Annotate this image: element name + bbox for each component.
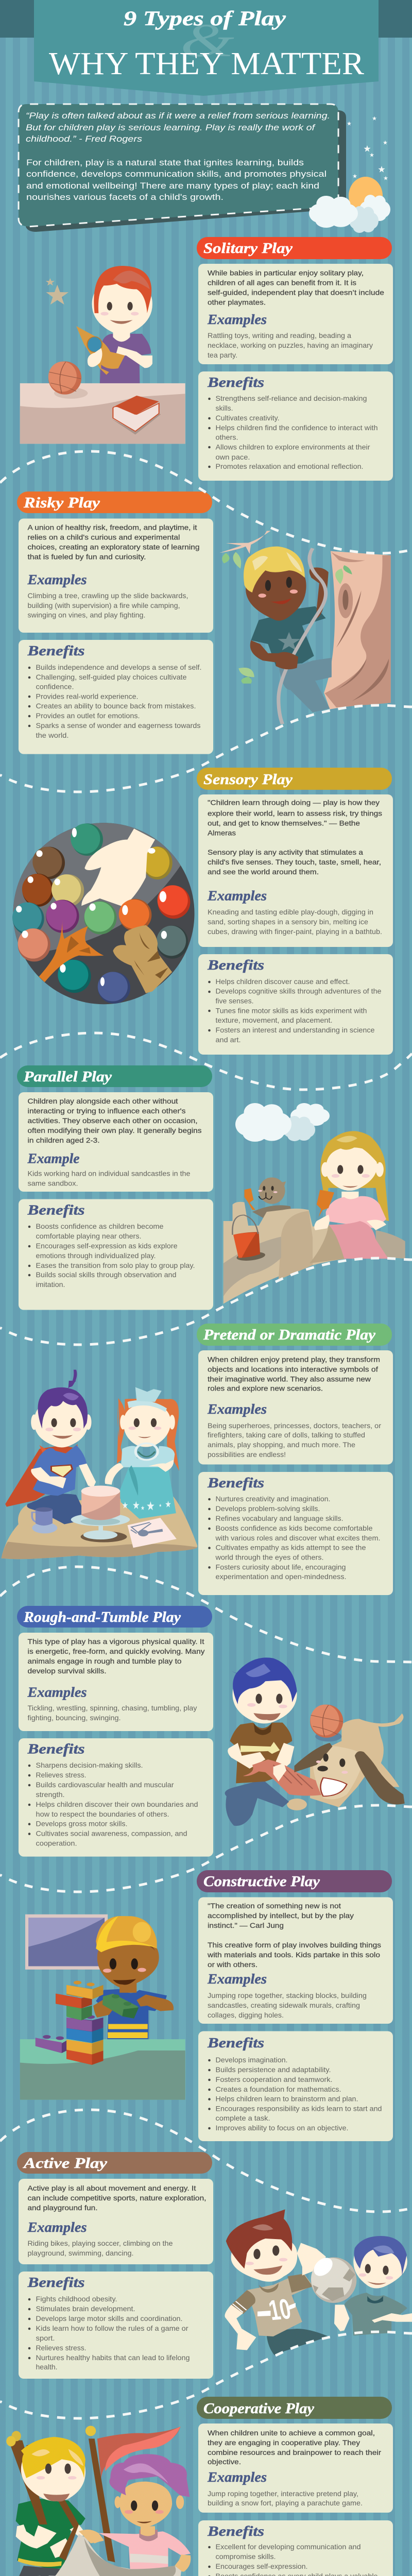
panel: introduction: childhood.” - Fred Rogers xyxy=(26,134,143,144)
illustration: hands in paint palette xyxy=(12,823,195,1005)
description and examples card: accomplished by intellect, but by the play xyxy=(208,1911,354,1920)
benefits card: Creates a foundation for mathematics. xyxy=(215,2085,341,2093)
benefits card: imitation. xyxy=(36,1280,65,1289)
benefits card xyxy=(198,1472,393,1595)
description and examples card: playground, swimming, dancing. xyxy=(28,2249,134,2257)
benefits card xyxy=(198,2031,393,2141)
heading pill: Parallel Play xyxy=(23,1069,112,1085)
panel: rough-and-tumble play xyxy=(17,1606,213,1857)
benefits card: Boosts confidence as children become xyxy=(36,1222,164,1230)
description and examples card: Sensory play is any activity that stimulates a xyxy=(208,848,363,856)
heading pill: Risky Play xyxy=(23,495,100,511)
description and examples card: out, and get to know themselves." — Bethe xyxy=(208,819,360,827)
description and examples card: develop survival skills. xyxy=(28,1667,106,1675)
heading pill xyxy=(197,1870,392,1892)
benefits card: Refines vocabulary and language skills. xyxy=(215,1514,343,1522)
benefits card: Fights childhood obesity. xyxy=(36,2295,117,2303)
cooperative benefits card: Benefits xyxy=(207,2523,264,2539)
description and examples card: self-guided, independent play that doesn’t include xyxy=(208,289,384,297)
heading pill: Solitary Play xyxy=(203,241,293,257)
description and examples card: Tickling, wrestling, spinning, chasing, tumbling, play xyxy=(28,1704,197,1712)
benefits card: Helps children discover cause and effect. xyxy=(215,977,350,986)
description and examples card: Examples xyxy=(27,2219,87,2235)
benefits card: Develops imagination. xyxy=(215,2056,287,2064)
benefits card: Develops problem-solving skills. xyxy=(215,1504,320,1513)
description and examples card: Jumping rope together, stacking blocks, building xyxy=(208,1991,367,1999)
benefits card: Fosters cooperation and teamwork. xyxy=(215,2075,333,2083)
heading pill: Rough-and-Tumble Play xyxy=(23,1609,181,1625)
benefits card: Develops large motor skills and coordination. xyxy=(36,2314,182,2323)
heading pill: Active Play xyxy=(23,2156,108,2172)
description and examples card xyxy=(19,1633,213,1731)
benefits card: Builds social skills through observation and xyxy=(36,1270,176,1279)
benefits card: Kids learn how to follow the rules of a game or xyxy=(36,2324,188,2332)
illustration: boy climbing tree on rope xyxy=(219,531,391,724)
description and examples card: choices, creating an exploratory state of learning xyxy=(28,543,200,551)
benefits card: five senses. xyxy=(215,996,253,1005)
description and examples card: Examples xyxy=(207,2469,267,2485)
heading pill xyxy=(17,1606,212,1628)
benefits card: experimentation and open-mindedness. xyxy=(215,1572,346,1581)
panel: constructive play xyxy=(197,1870,393,2141)
description and examples card: can include competitive sports, nature exploration, xyxy=(28,2194,206,2202)
benefits card: Provides real-world experience. xyxy=(36,692,138,700)
panel: solitary play xyxy=(197,237,393,481)
description and examples card: Active play is all about movement and energy. It xyxy=(28,2184,196,2192)
panel: introduction: For children, play is a natural state that ignites learning, builds xyxy=(26,158,304,167)
benefits card: Fosters curiosity about life, encouraging xyxy=(215,1563,346,1571)
panel: risky play xyxy=(17,492,213,754)
benefits card xyxy=(19,640,213,754)
illustration: boy and dog tugging a towel xyxy=(225,1657,405,1826)
title: Why They Matter: WHY THEY MATTER xyxy=(49,46,365,81)
description and examples card: possibilities are endless! xyxy=(208,1450,286,1459)
header banner xyxy=(0,0,412,96)
description and examples card: combine resources and brainpower to reach their xyxy=(208,2448,381,2456)
benefits card: Nurtures creativity and imagination. xyxy=(215,1495,331,1503)
benefits card: health. xyxy=(36,2363,58,2371)
description and examples card: relies on a child's curious and experimental xyxy=(28,533,180,541)
description and example card: interacting or trying to influence each other's xyxy=(28,1107,185,1115)
heading pill xyxy=(197,2397,392,2419)
description and examples card: children of all ages can benefit from it. It is xyxy=(208,279,356,287)
benefits card: Develops gross motor skills. xyxy=(36,1820,128,1828)
benefits card: Strengthens self-reliance and decision-making xyxy=(215,394,367,402)
benefits card: Benefits xyxy=(207,2035,264,2050)
description and examples card: child's five senses. They touch, taste, smell, hear, xyxy=(208,858,381,866)
description and example card: in children aged 2-3. xyxy=(28,1136,100,1144)
benefits card: Sharpens decision-making skills. xyxy=(36,1761,143,1769)
description and examples card: objects and locations into interactive symbols of xyxy=(208,1365,378,1374)
description and examples card: Riding bikes, playing soccer, climbing on the xyxy=(28,2239,173,2247)
description and examples card xyxy=(198,1350,393,1464)
description and examples card: This type of play has a vigorous physical quality. It xyxy=(28,1637,204,1646)
panel: introduction: confidence, develops communication skills, and promotes physical xyxy=(26,169,327,179)
benefits card: Benefits xyxy=(207,375,264,390)
description and examples card xyxy=(198,2424,393,2513)
description and examples card: Examples xyxy=(27,572,87,587)
description and examples card xyxy=(198,794,393,947)
benefits card: Helps children discover their own boundaries and xyxy=(36,1800,198,1808)
benefits card: world through the eyes of others. xyxy=(215,1553,323,1561)
illustration: two boys with soccer ball: 10 xyxy=(266,2293,294,2327)
benefits card: with various roles and discover what excites them. xyxy=(215,1534,380,1542)
description and examples card: roles and explore new scenarios. xyxy=(208,1384,323,1393)
cooperative benefits card xyxy=(198,2520,393,2576)
benefits card: Cultivates empathy as kids attempt to see the xyxy=(215,1544,366,1552)
description and examples card: sandcastles, creating sidewalk murals, crafting xyxy=(208,2001,360,2009)
description and examples card: Climbing a tree, crawling up the slide backwards, xyxy=(28,591,188,600)
benefits card: own pace. xyxy=(215,453,250,461)
illustration: kids with flags and parachute xyxy=(6,2426,191,2576)
panel: parallel play xyxy=(17,1065,213,1310)
description and examples card: animals, play shopping, and much more. The xyxy=(208,1440,355,1449)
benefits card: others. xyxy=(215,433,238,442)
description and examples card: "The creation of something new is not xyxy=(208,1902,341,1910)
benefits card: strength. xyxy=(36,1790,65,1799)
description and examples card: Examples xyxy=(27,1685,87,1700)
description and examples card: instinct." — Carl Jung xyxy=(208,1921,284,1929)
description and examples card: firefighters, taking care of dolls, talking to stuffed xyxy=(208,1431,365,1439)
benefits card: Nurtures healthy habits that can lead to lifelong xyxy=(36,2353,190,2362)
benefits card: Builds independence and develops a sense of self. xyxy=(36,663,202,671)
benefits card: Improves ability to focus on an objective. xyxy=(215,2124,348,2132)
benefits card xyxy=(198,371,393,481)
heading pill: Cooperative Play xyxy=(203,2401,315,2417)
illustration: clouds xyxy=(235,1103,330,1142)
benefits card: the world. xyxy=(36,731,69,739)
benefits card: Tunes fine motor skills as kids experiment with xyxy=(215,1006,367,1014)
heading pill xyxy=(17,1065,212,1087)
description and examples card: Being superheroes, princesses, doctors, teachers, or xyxy=(208,1421,381,1430)
benefits card: Encourages responsibility as kids learn to start and xyxy=(215,2104,382,2112)
icon: stars, sun and clouds xyxy=(309,116,390,233)
description and examples card: Rattling toys, writing and reading, beading a xyxy=(208,331,351,340)
description and examples card: Kneading and tasting edible play-dough, digging in xyxy=(208,908,373,916)
benefits card: Cultivates social awareness, compassion, and xyxy=(36,1829,187,1838)
description and examples card: they are engaging in cooperative play. They xyxy=(208,2438,360,2447)
description and examples card: fighting, bouncing, swinging. xyxy=(28,1714,121,1722)
benefits card: comfortable playing near others. xyxy=(36,1232,141,1240)
description and examples card: swinging on vines, and play fighting. xyxy=(28,611,145,619)
description and examples card: that is fueled by fun and curiosity. xyxy=(28,552,146,561)
panel: introduction: But for children play is serious learning. Play is really the work of xyxy=(26,123,316,132)
description and examples card: and playground fun. xyxy=(28,2204,98,2212)
cooperative benefits card: compromise skills. xyxy=(215,2552,276,2561)
benefits card: Builds persistence and adaptability. xyxy=(215,2065,331,2074)
benefits card: cooperation. xyxy=(36,1839,77,1848)
benefits card: Fosters an interest and understanding in science xyxy=(215,1026,375,1034)
illustration: boy in hard hat stacking blocks xyxy=(20,1914,185,2100)
benefits card: Provides an outlet for emotions. xyxy=(36,711,140,720)
description and examples card: building a snow fort, playing a parachute game. xyxy=(208,2499,363,2507)
benefits card: Creates an ability to bounce back from mistakes. xyxy=(36,702,196,710)
benefits card: Boosts confidence as kids become comfortable xyxy=(215,1524,373,1532)
heading pill xyxy=(197,237,392,259)
benefits card: complete a task. xyxy=(215,2114,270,2122)
benefits card: Benefits xyxy=(207,1475,264,1490)
description and examples card xyxy=(19,2179,213,2264)
panel: active play xyxy=(17,2152,213,2379)
panel: introduction: nourishes various facets of a child's growth. xyxy=(26,192,224,202)
benefits card: Eases the transition from solo play to group play. xyxy=(36,1261,195,1269)
description and examples card: necklace, working on puzzles, having an imaginary xyxy=(208,341,373,349)
description and examples card: building (with supervision) a fire while camping, xyxy=(28,601,180,609)
description and examples card xyxy=(19,518,213,633)
benefits card: Benefits xyxy=(207,957,264,973)
benefits card: sport. xyxy=(36,2334,55,2342)
description and examples card: "Children learn through doing — play is how they xyxy=(208,799,380,807)
description and examples card: other playmates. xyxy=(208,298,266,306)
illustration: boy and girl pretending with cake xyxy=(2,1370,198,1559)
description and examples card: When children enjoy pretend play, they transform xyxy=(208,1355,380,1364)
description and examples card: This creative form of play involves building things xyxy=(208,1941,381,1949)
benefits card: Sparks a sense of wonder and eagerness towards xyxy=(36,721,201,730)
benefits card: Promotes relaxation and emotional reflection. xyxy=(215,462,364,470)
benefits card xyxy=(19,1199,213,1310)
benefits card: confidence. xyxy=(36,682,74,690)
benefits card: Helps children learn to brainstorm and plan. xyxy=(215,2095,358,2103)
heading pill xyxy=(17,2152,212,2174)
benefits card xyxy=(19,2272,213,2379)
benefits card: Builds cardiovascular health and muscular xyxy=(36,1781,174,1789)
description and examples card: and see the world around them. xyxy=(208,868,319,876)
description and examples card: or with others. xyxy=(208,1960,258,1969)
benefits card: Cultivates creativity. xyxy=(215,414,279,422)
panel: introduction: and emotional wellbeing! There are many types of play; each kind xyxy=(26,181,319,191)
description and examples card: When children unite to achieve a common goal, xyxy=(208,2429,375,2437)
description and examples card: Examples xyxy=(207,888,267,904)
description and examples card: sand, sorting shapes in a sensory bin, melting ice xyxy=(208,918,368,926)
description and examples card: with materials and tools. Kids partake in this solo xyxy=(207,1951,380,1959)
title: 9 Types of Play: 9 Types of Play xyxy=(124,7,286,30)
description and examples card: explore their world, learn to assess risk, try things xyxy=(208,809,382,818)
description and example card: Kids working hard on individual sandcastles in the xyxy=(28,1170,191,1178)
description and examples card: Examples xyxy=(207,312,267,327)
benefits card: skills. xyxy=(215,404,233,412)
benefits card: Stimulates brain development. xyxy=(36,2304,135,2313)
heading pill xyxy=(197,1324,392,1346)
panel: introduction: “Play is often talked about as if it were a relief from serious learning. xyxy=(26,111,330,121)
description and examples card: animals engage in rough and tumble play to xyxy=(28,1657,182,1665)
benefits card: Benefits xyxy=(27,643,85,658)
cooperative benefits card: Encourages self-expression. xyxy=(215,2562,308,2570)
heading pill xyxy=(197,768,392,790)
description and examples card: tea party. xyxy=(208,351,237,359)
description and examples card: Examples xyxy=(207,1401,267,1417)
description and examples card xyxy=(198,1897,393,2024)
benefits card: emotions through individualized play. xyxy=(36,1251,156,1260)
heading pill: Pretend or Dramatic Play xyxy=(203,1327,376,1343)
title ampersand: & xyxy=(180,14,235,66)
benefits card: Benefits xyxy=(27,1202,85,1218)
illustration: two boys with soccer ball xyxy=(225,2209,412,2355)
benefits card: Relieves stress. xyxy=(36,2344,87,2352)
benefits card: Allows children to explore environments at their xyxy=(215,443,370,451)
benefits card: Helps children find the confidence to interact with xyxy=(215,423,378,432)
panel: cooperative play xyxy=(197,2397,393,2513)
description and examples card: Jump roping together, interactive pretend play, xyxy=(208,2489,358,2498)
illustration: boy with rocket, ball and book xyxy=(20,266,185,444)
description and example card xyxy=(19,1092,213,1192)
description and examples card: Almeras xyxy=(208,828,236,837)
heading pill xyxy=(17,492,212,513)
description and example card: Example xyxy=(27,1151,80,1166)
description and examples card: cubes, drawing with finger-paint, playing in a bathtub. xyxy=(208,927,382,936)
description and examples card: collages, digging holes. xyxy=(208,2011,284,2019)
description and examples card xyxy=(198,264,393,364)
benefits card xyxy=(198,954,393,1055)
benefits card: and art. xyxy=(215,1036,241,1044)
description and examples card: A union of healthy risk, freedom, and playtime, it xyxy=(28,523,197,532)
heading pill: Constructive Play xyxy=(203,1874,320,1890)
description and example card: activities. They observe each other on occasion, xyxy=(28,1116,198,1125)
benefits card: texture, movement, and placement. xyxy=(215,1016,333,1024)
benefits card xyxy=(19,1738,213,1857)
description and example card: Children play alongside each other without xyxy=(28,1097,178,1105)
benefits card: Benefits xyxy=(27,2275,85,2290)
panel: pretend or dramatic play xyxy=(197,1324,393,1595)
benefits card: Benefits xyxy=(27,1741,85,1757)
description and examples card: While babies in particular enjoy solitary play, xyxy=(208,269,364,277)
benefits card: Relieves stress. xyxy=(36,1771,87,1779)
description and examples card: is energetic, free-form, and quickly evolving. Many xyxy=(28,1647,205,1655)
panel: sensory play xyxy=(197,768,393,1055)
benefits card: Develops cognitive skills through adventures of the xyxy=(215,987,382,995)
benefits card: Challenging, self-guided play choices cultivate xyxy=(36,673,187,681)
benefits card: how to respect the boundaries of others. xyxy=(36,1810,169,1818)
panel: introduction xyxy=(19,104,346,232)
benefits card: Encourages self-expression as kids explore xyxy=(36,1242,178,1250)
illustration: girl and cat with sandcastle xyxy=(224,1131,405,1304)
description and example card: same sandbox. xyxy=(28,1179,78,1187)
description and examples card: objective. xyxy=(208,2458,241,2466)
description and examples card: Examples xyxy=(207,1971,267,1987)
heading pill: Sensory Play xyxy=(203,772,293,788)
cooperative benefits card: Excellent for developing communication and xyxy=(215,2543,360,2551)
description and example card: often modifying their own play. It generally begins xyxy=(28,1126,202,1134)
description and examples card: their imaginative world. They also assume new xyxy=(208,1375,371,1383)
